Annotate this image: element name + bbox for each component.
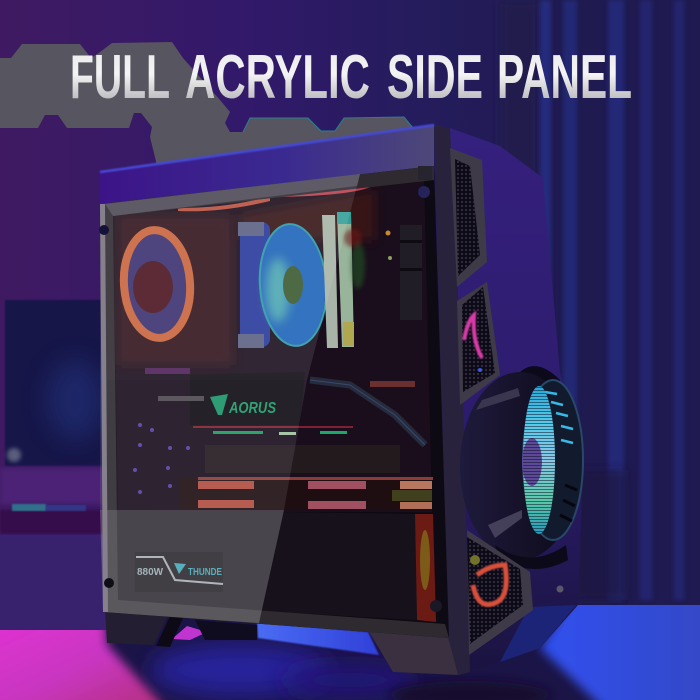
- front fan housing: [460, 366, 583, 569]
- mesh vent 2: [457, 282, 500, 405]
- mesh vent 3: [467, 530, 533, 655]
- front LED ring: [522, 380, 583, 540]
- lower front blue edge: [500, 605, 576, 662]
- orange ring fan: [120, 228, 194, 340]
- lower board: [205, 445, 400, 473]
- case feet: [105, 610, 460, 675]
- top panel: [100, 125, 434, 204]
- side glass panel: [100, 166, 449, 638]
- title: SIDE: [387, 43, 483, 112]
- RAM sticks: [322, 212, 354, 348]
- case logo: [556, 586, 564, 592]
- power supply label: 880W: [137, 567, 164, 578]
- motherboard interior: [113, 180, 433, 512]
- memory and expansion detail dots: [133, 423, 190, 494]
- front pillar: [434, 125, 470, 675]
- PC case: [99, 125, 583, 675]
- title: PANEL: [497, 43, 632, 112]
- upper glow strips: [178, 196, 270, 211]
- mesh vent 1: [450, 148, 487, 287]
- power supply shroud: [116, 510, 436, 622]
- title: FULL: [70, 43, 170, 112]
- glass frame and tint: [100, 166, 449, 638]
- orange fans bottom: [180, 477, 433, 510]
- power supply label: THUNDE: [188, 567, 222, 578]
- top light edge: [100, 125, 434, 172]
- blue cpu cooler fan: [238, 222, 330, 348]
- title: [70, 43, 632, 112]
- title: ACRYLIC: [185, 43, 370, 112]
- desk surface: [0, 605, 700, 700]
- motherboard LEDs: [344, 229, 392, 289]
- hexagon graphic overlay: [0, 42, 420, 190]
- power supply label: [135, 552, 223, 592]
- side and front body: [434, 125, 583, 675]
- panel screws: [99, 166, 442, 612]
- housing lower lip: [495, 545, 568, 569]
- AORUS logo text: AORUS: [228, 400, 276, 417]
- monitor in background: [0, 300, 105, 534]
- graphics card: [145, 368, 425, 445]
